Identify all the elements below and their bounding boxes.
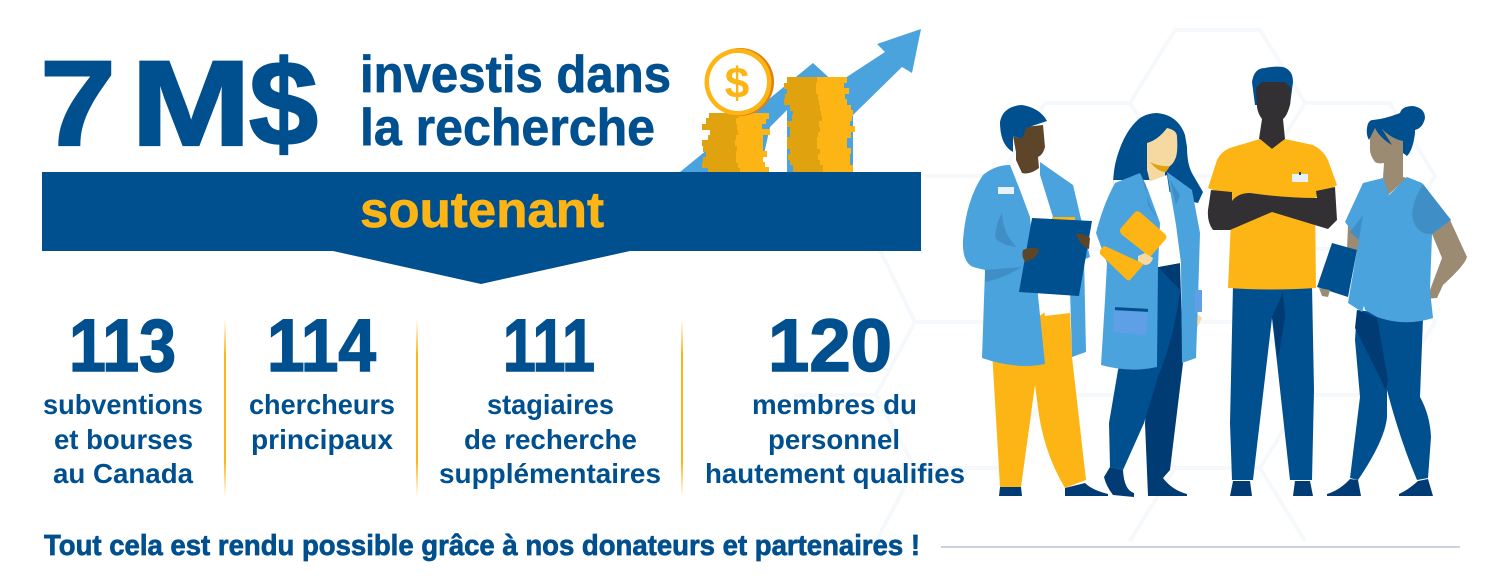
folder	[1100, 211, 1166, 280]
legs	[1350, 310, 1431, 480]
coin with dollar sign	[704, 48, 774, 116]
hair	[1252, 67, 1293, 105]
coat	[1096, 172, 1200, 370]
icon: rising arrow	[680, 29, 921, 172]
coin stack right	[784, 77, 855, 172]
arms	[1208, 187, 1337, 230]
neck and face	[1370, 128, 1407, 195]
stat: 111 stagiaires: 111	[503, 304, 595, 387]
coat	[963, 162, 1090, 366]
hair	[1113, 113, 1203, 203]
stat: 113 subventions: 113	[69, 304, 176, 387]
skin: neck and face	[1147, 128, 1202, 330]
person 1: man with clipboard	[963, 105, 1108, 496]
head and neck	[1256, 82, 1291, 149]
name badge	[998, 187, 1014, 194]
pants	[1230, 285, 1314, 480]
hands	[1022, 234, 1090, 262]
stat: 113 subventions	[43, 304, 203, 489]
hair	[1367, 106, 1425, 156]
shoes	[1230, 481, 1313, 496]
sleeve accent	[1195, 290, 1202, 312]
neck and face	[1013, 125, 1045, 173]
heading: investis dans la recherche	[360, 46, 671, 157]
title: 7 M$: M	[131, 35, 251, 171]
arm	[1412, 220, 1467, 300]
stat: 114 chercheurs: 114	[267, 304, 376, 387]
hand	[1138, 253, 1153, 265]
clipboard	[1019, 217, 1092, 296]
shirt	[1148, 175, 1180, 267]
shirt	[1345, 177, 1451, 322]
legs	[1145, 263, 1187, 496]
person 2: woman with folder	[1096, 113, 1203, 497]
footer text: Tout cela est rendu possible grâce à nos donateurs et partenaires !	[44, 530, 920, 562]
stat: 111 stagiaires	[439, 304, 661, 489]
stat: 114 chercheurs	[249, 304, 395, 455]
title: 7 M$: $	[249, 35, 318, 171]
coin with dollar sign: $	[725, 59, 749, 108]
person 3: man with crossed arms	[1208, 67, 1337, 496]
shoes	[1327, 479, 1433, 496]
shirt	[1020, 165, 1070, 316]
name badge	[1292, 174, 1308, 182]
coin stack left	[702, 113, 770, 172]
heading: investis dans la recherche: investis dans	[360, 46, 671, 104]
title: 7 M$: 7	[40, 35, 116, 171]
stat: 120 membres: hautement qualifies	[705, 458, 965, 489]
stat: 120 membres: personnel	[768, 424, 900, 455]
stat: 111 stagiaires: supplémentaires	[439, 458, 661, 489]
hair	[1000, 105, 1047, 152]
stat: 113 subventions: et bourses	[54, 424, 193, 455]
clipboard	[1317, 243, 1357, 297]
stat: 120 membres	[705, 304, 965, 489]
stat: 120 membres: 120	[768, 304, 892, 387]
stat: 111 stagiaires: stagiaires	[487, 389, 614, 420]
shoes	[999, 483, 1108, 496]
stat: 114 chercheurs: chercheurs	[249, 389, 395, 420]
pocket	[1113, 310, 1148, 335]
stat: 113 subventions: au Canada	[53, 458, 194, 489]
heading: investis dans la recherche: la recherche	[360, 99, 655, 157]
icon: coin stacks	[702, 48, 855, 172]
stat: 114 chercheurs: principaux	[251, 424, 394, 455]
stat: 111 stagiaires: de recherche	[464, 424, 637, 455]
far arm	[1347, 225, 1360, 252]
banner	[42, 172, 921, 284]
stat: 113 subventions: subventions	[43, 389, 203, 420]
shoe	[1104, 467, 1134, 497]
shirt	[1208, 139, 1337, 290]
title: 7 M$	[40, 35, 318, 171]
coat shadow	[985, 212, 1022, 282]
stat: 120 membres: membres du	[752, 389, 917, 420]
banner label: soutenant: soutenant	[360, 182, 604, 238]
person 4: woman with hair bun	[1317, 106, 1467, 496]
pants	[992, 311, 1086, 488]
